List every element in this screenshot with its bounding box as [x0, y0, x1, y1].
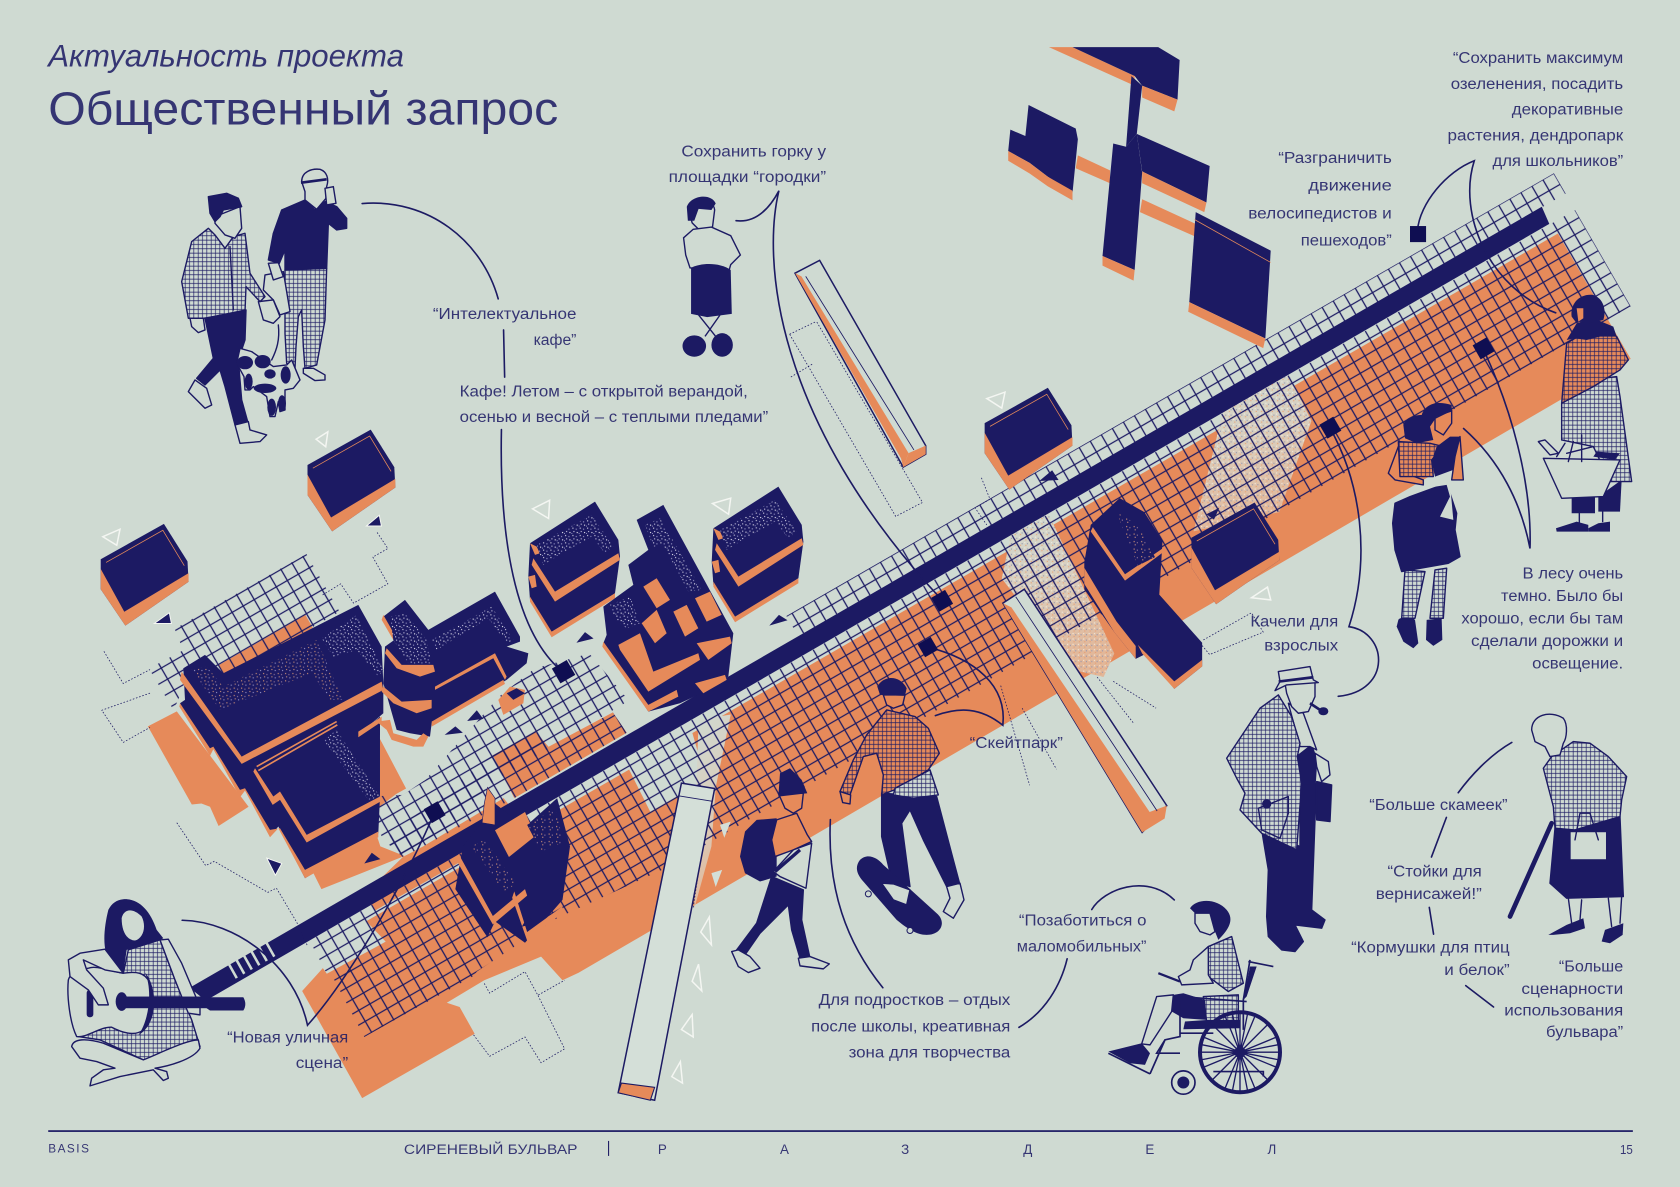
quote: benches and stands: “Стойки для: [1388, 863, 1482, 880]
quote: keep greenery: декоративные: [1512, 102, 1623, 119]
callout lines: [182, 161, 1556, 1027]
quote: forest: освещение.: [1532, 655, 1623, 672]
grid top left: [149, 554, 340, 710]
quote: benches and stands: [1351, 797, 1510, 979]
quote: separate cyclists: “Разграничить: [1278, 150, 1392, 167]
figure: man with phone: [263, 169, 347, 381]
quote: forest: В лесу очень: [1522, 566, 1623, 583]
map triangles: navy markers: [154, 470, 1219, 927]
footer: [48, 1130, 1633, 1157]
quote: keep greenery: [1448, 50, 1623, 170]
figure: girl with guitar: [68, 899, 245, 1086]
grid middle: [370, 653, 629, 855]
quote: scenarios: [1504, 959, 1623, 1041]
quote: separate cyclists: велосипедистов и: [1248, 206, 1392, 223]
two-storey block left: [528, 502, 620, 637]
quote: separate cyclists: движение: [1308, 178, 1392, 195]
quote: scenarios: бульвара”: [1546, 1024, 1623, 1041]
title: Актуальность проекта: [46, 38, 404, 73]
quote: scenarios: использования: [1504, 1003, 1623, 1020]
quote: cafe: [433, 306, 768, 426]
residential box building 1: [101, 524, 189, 626]
box building 4: [1191, 502, 1279, 604]
faded transition zones: [1194, 371, 1311, 531]
quote: forest: [1461, 566, 1623, 672]
quote: keep greenery: растения, дендропарк: [1448, 127, 1623, 144]
figure: skater: [840, 678, 964, 935]
title: [46, 38, 558, 134]
quote: accessibility: [1017, 913, 1147, 955]
quote: separate cyclists: [1248, 150, 1392, 249]
quote: teenagers: [811, 992, 1011, 1061]
figure: teen with backpack: [732, 768, 829, 973]
quote: teenagers: Для подростков – отдых: [819, 992, 1011, 1009]
footer: Е: [1145, 1142, 1154, 1157]
quote: benches and stands: и белок”: [1444, 962, 1510, 979]
map triangles: pale fills on the band: [711, 822, 731, 887]
orange ground: main band: [302, 234, 1631, 1098]
location markers: [424, 226, 1495, 823]
quote: cafe: “Интелектуальное: [433, 306, 576, 323]
figure: woman with shopping bag: [1538, 295, 1632, 532]
box building 3: [985, 388, 1072, 490]
map triangles: white markers: [103, 392, 1271, 1083]
footer: BASIS: [48, 1143, 89, 1156]
footer: Р: [658, 1142, 667, 1157]
orange ground: behind buildings: [311, 730, 429, 889]
quote: street stage: “Новая уличная: [227, 1029, 348, 1046]
figure: man in beanie: [182, 193, 280, 443]
quote: benches and stands: вернисажей!”: [1376, 886, 1482, 903]
quote: keep greenery: для школьников”: [1492, 153, 1623, 170]
quote: forest: сделали дорожки и: [1471, 633, 1623, 650]
small pavilion: [498, 687, 525, 715]
quote: swings: Качели для: [1250, 614, 1338, 631]
stepped central block: [602, 505, 733, 712]
footer: СИРЕНЕВЫЙ БУЛЬВАР: [404, 1142, 578, 1157]
quote: street stage: сцена”: [296, 1055, 348, 1072]
figure: spotted dog: [237, 348, 300, 417]
quote: scenarios: “Больше: [1559, 959, 1623, 976]
building: round annex: [377, 592, 528, 747]
figure: woman hugging a child: [1388, 403, 1463, 648]
orange ground: upper patches: [219, 615, 313, 677]
title: Общественный запрос: [48, 82, 558, 134]
quote: forest: темно. Было бы: [1501, 588, 1623, 605]
quote: forest: хорошо, если бы там: [1461, 610, 1623, 627]
quote: benches and stands: “Кормушки для птиц: [1351, 939, 1510, 956]
quote: skatepark: “Скейтпарк”: [970, 735, 1063, 752]
figure: old man with pipe: [1227, 667, 1332, 952]
quote: cafe: осенью и весной – с теплыми пледами”: [460, 409, 768, 426]
quote: teenagers: после школы, креативная: [811, 1019, 1010, 1036]
quote: separate cyclists: пешеходов”: [1301, 232, 1392, 249]
white bar 1: [795, 260, 926, 467]
footer: Д: [1023, 1142, 1032, 1157]
quote: cafe: кафе”: [534, 332, 576, 349]
footer: А: [780, 1142, 789, 1157]
quote: swings: взрослых: [1264, 637, 1338, 654]
cross-shaped block on the right band: [1084, 498, 1202, 689]
figure: kid: [682, 197, 740, 357]
quote: keep greenery: озеленения, посадить: [1451, 76, 1623, 93]
grid on the lower band: [310, 210, 1631, 1037]
quote: teenagers: зона для творчества: [849, 1044, 1011, 1061]
white bar 2: [1003, 589, 1167, 832]
two-storey block right: [712, 487, 803, 622]
dotted plot outlines: [102, 321, 1263, 1063]
building: large L block: [179, 605, 383, 878]
quote: street stage: [227, 1029, 348, 1072]
quote: benches and stands: “Больше скамеек”: [1369, 797, 1507, 814]
box building 2: [308, 430, 395, 531]
quote: scenarios: сценарности: [1521, 981, 1623, 998]
upper white grid band: [786, 173, 1566, 636]
quote: accessibility: маломобильных”: [1017, 938, 1146, 955]
upper right building group: [1008, 47, 1271, 348]
quote: keep the hill: площадки “городки”: [669, 169, 826, 186]
stepped block on the lower band: [455, 787, 570, 943]
figure: old woman with cane: [1510, 714, 1627, 943]
quote: swings: [1250, 614, 1338, 654]
quote: keep greenery: “Сохранить максимум: [1453, 50, 1623, 67]
quote: accessibility: “Позаботиться о: [1019, 913, 1147, 930]
white bar 3: [618, 783, 715, 1100]
footer: 15: [1620, 1142, 1633, 1157]
orange ground: left plot: [148, 711, 249, 826]
quote: cafe: Кафе! Летом – с открытой верандой,: [460, 383, 748, 400]
map: boulevard plan surfaces: [148, 173, 1631, 1098]
navy boulevard strip: [190, 207, 1549, 1001]
quote: keep the hill: [669, 143, 826, 186]
white patches below the strip: [308, 919, 386, 974]
quote: keep the hill: Сохранить горку у: [681, 143, 826, 160]
footer: Л: [1268, 1142, 1276, 1157]
footer: З: [901, 1142, 909, 1157]
figure: wheelchair woman: [1108, 901, 1280, 1094]
